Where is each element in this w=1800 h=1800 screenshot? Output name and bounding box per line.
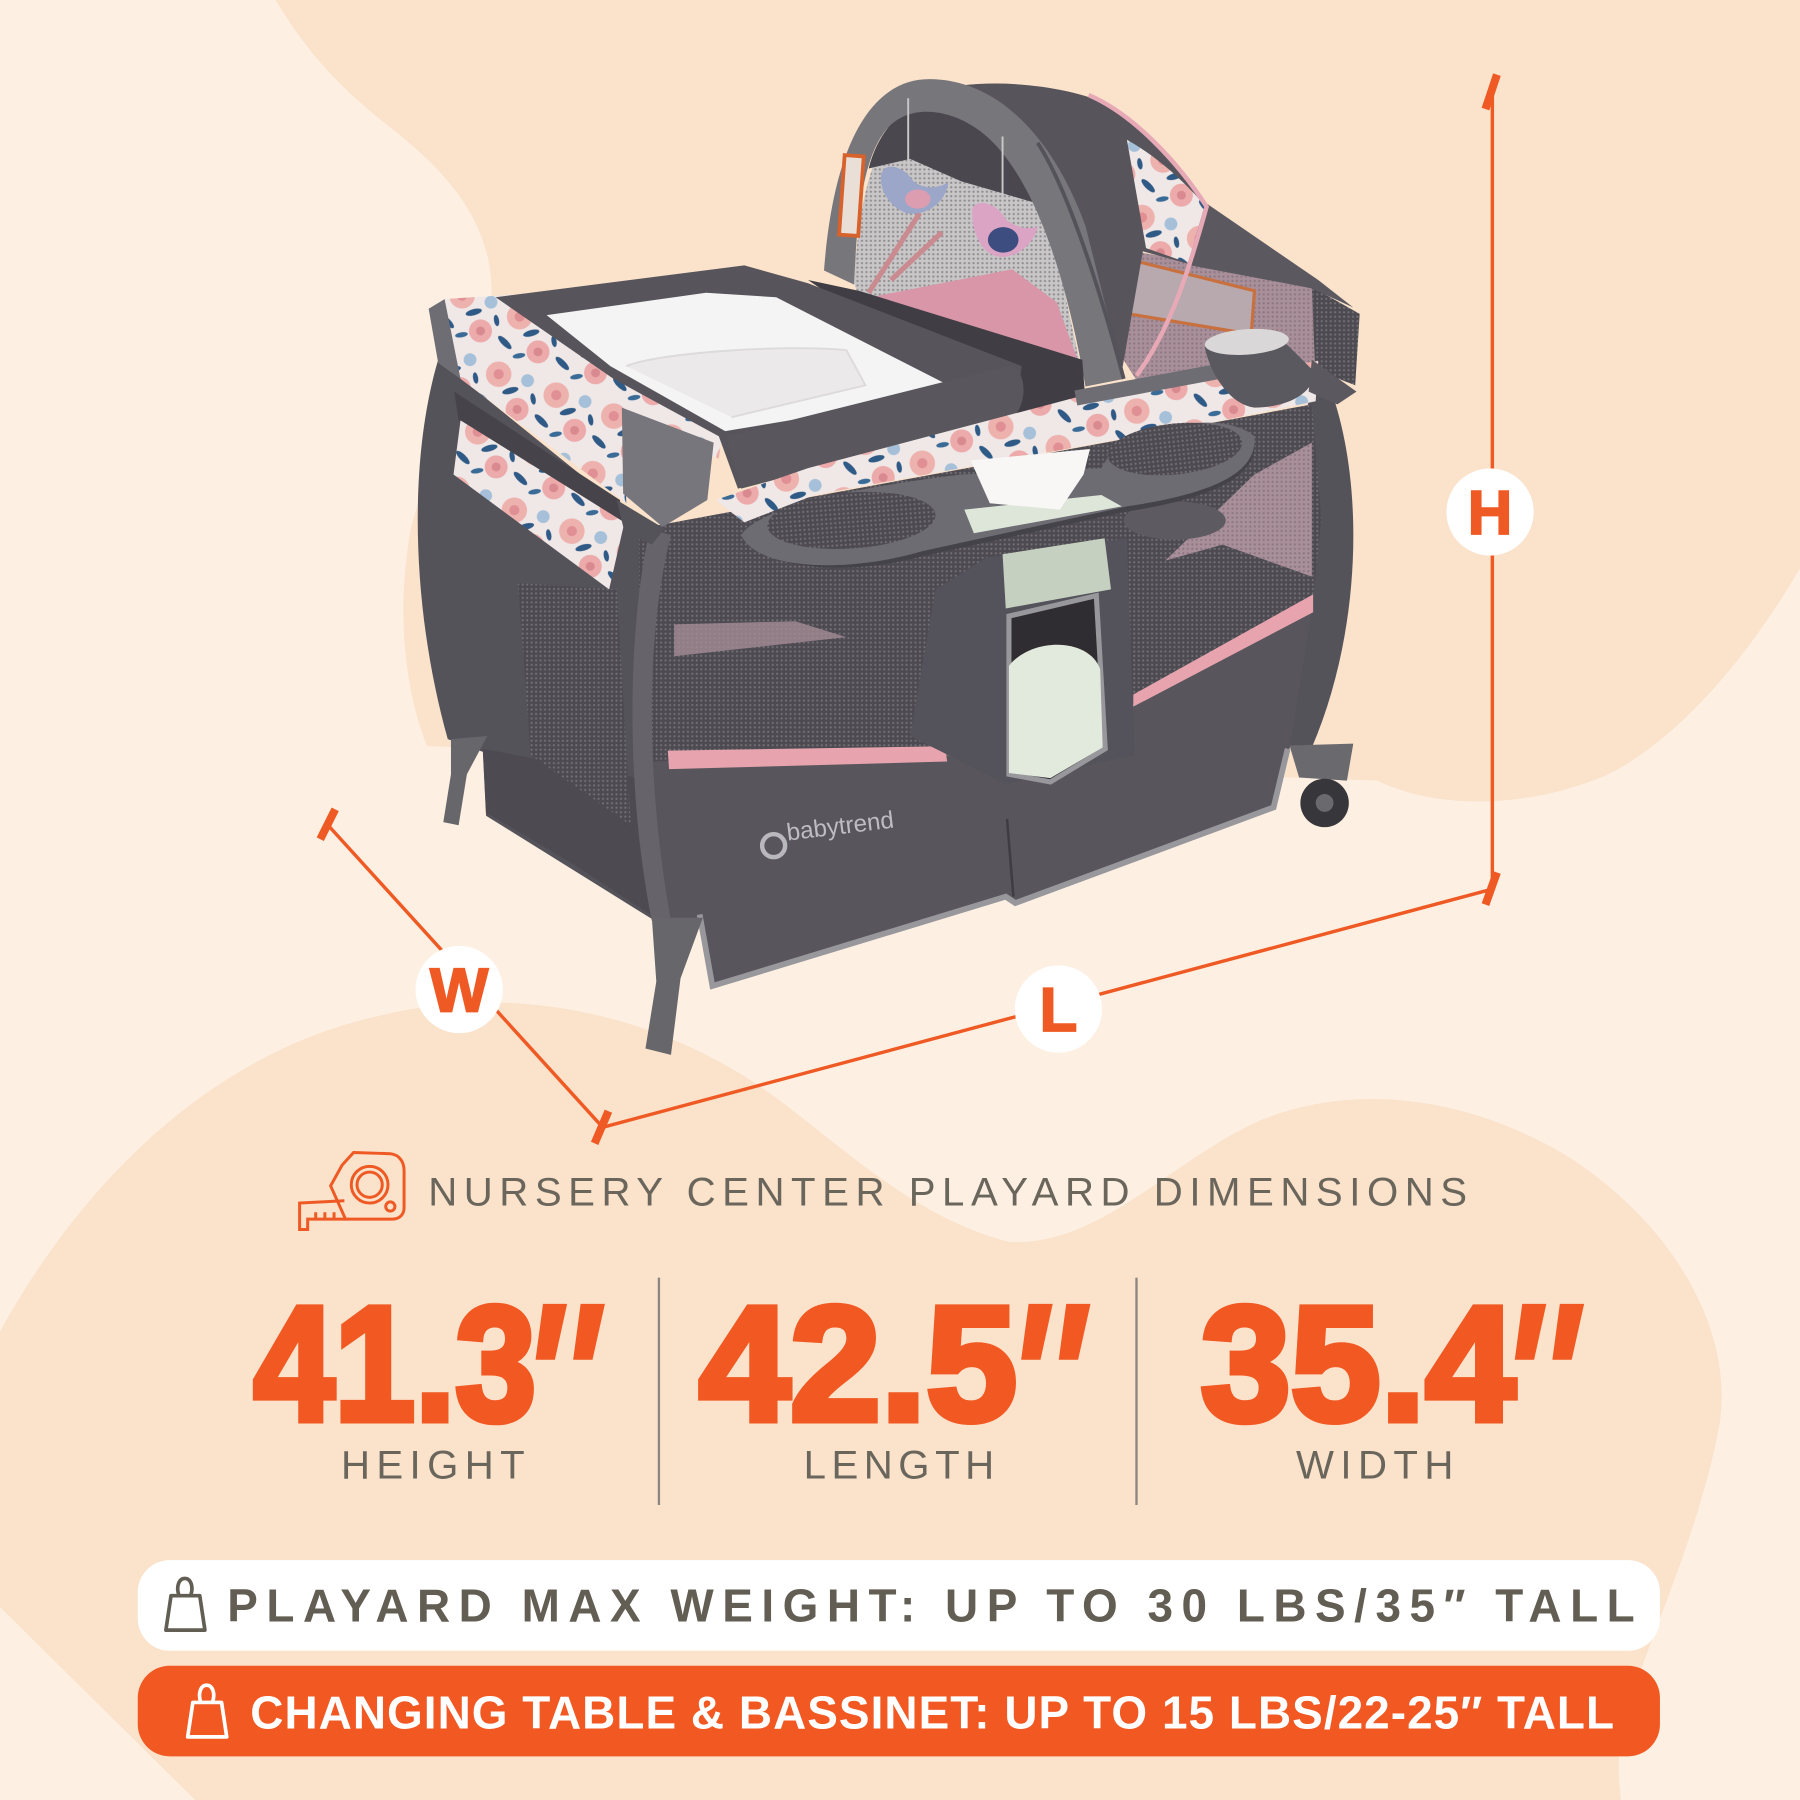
left plastic corner bbox=[429, 299, 461, 379]
lower front fabric bbox=[645, 602, 1313, 985]
stat: length bbox=[699, 1255, 1111, 1506]
gap behind changing table bbox=[808, 280, 1085, 420]
brand name: babytrend bbox=[785, 807, 895, 847]
lower basket left bbox=[763, 551, 929, 605]
tray bbox=[741, 423, 1255, 565]
changing pad bbox=[547, 293, 961, 431]
canopy pink trim bbox=[1089, 95, 1207, 376]
left floral flap bbox=[454, 420, 624, 589]
inner bassinet opening bbox=[854, 101, 1079, 360]
wipes package bbox=[964, 495, 1122, 533]
arch frame bbox=[824, 79, 1124, 387]
rear left leg bbox=[443, 736, 487, 825]
product photo: playard illustration bbox=[418, 79, 1360, 1055]
stat: height: 41.3 bbox=[254, 1272, 536, 1455]
front post bbox=[632, 529, 671, 921]
canopy rear cover bbox=[1191, 204, 1353, 307]
pink bassinet wall bbox=[858, 269, 1079, 364]
diapers bbox=[1009, 645, 1103, 778]
skirt trim bbox=[700, 749, 1288, 986]
skirt fold bbox=[1007, 819, 1013, 897]
stat: length: 42.5 bbox=[699, 1272, 1017, 1455]
tissue bbox=[971, 449, 1090, 510]
caddy opening bbox=[1009, 596, 1105, 782]
left floral rail bbox=[443, 295, 722, 503]
pink interior left bbox=[674, 621, 846, 656]
pink interior right bbox=[1165, 443, 1312, 577]
caddy bbox=[910, 538, 1135, 784]
left side panel bbox=[418, 360, 661, 921]
stat: length: " bbox=[981, 1255, 1111, 1506]
arch inner shadow bbox=[1038, 143, 1124, 379]
changing table cushion ring bbox=[496, 265, 1022, 489]
stat: width: " bbox=[1475, 1255, 1605, 1506]
bird blue wing bbox=[905, 189, 931, 209]
panel: playard max weight bbox=[138, 1560, 1660, 1651]
stat: width: WIDTH bbox=[1296, 1443, 1453, 1488]
bird blue bbox=[881, 167, 948, 214]
pink stripe right bbox=[1133, 594, 1313, 707]
rear mesh wall bbox=[1095, 245, 1315, 385]
mobile strings bbox=[908, 98, 1003, 207]
heading: NURSERY CENTER PLAYARD DIMENSIONS bbox=[428, 1169, 1467, 1214]
dimension line: height bbox=[1446, 75, 1534, 905]
bird pink bbox=[972, 203, 1038, 257]
orange tag bbox=[839, 155, 864, 236]
icon: weight white bbox=[188, 1685, 227, 1737]
dimension line: width bbox=[320, 809, 608, 1143]
divider bbox=[1135, 1278, 1138, 1505]
caddy wipes bbox=[1003, 538, 1111, 608]
canopy floral panel bbox=[1127, 140, 1205, 263]
right hinge bbox=[1309, 360, 1356, 404]
main front mesh bbox=[639, 404, 1321, 765]
cup right bbox=[1105, 417, 1245, 481]
dimension line: length bbox=[603, 890, 1490, 1127]
rear corner mesh bbox=[1305, 283, 1360, 385]
side fold band bbox=[454, 392, 622, 526]
stat: height: HEIGHT bbox=[341, 1443, 525, 1488]
divider bbox=[658, 1278, 660, 1505]
canopy fabric bbox=[961, 84, 1207, 379]
stat: height bbox=[254, 1255, 625, 1506]
panel: changing table and bassinet weight: CHANGING TABLE & BASSINET: UP TO 15 LBS/22-25″ TALL bbox=[250, 1686, 1614, 1738]
pad shadow fold bbox=[626, 348, 865, 417]
flap to post filler bbox=[617, 500, 665, 545]
mesh struts bbox=[869, 213, 942, 293]
icon: weight bbox=[166, 1578, 205, 1630]
bird pink wing bbox=[988, 227, 1019, 253]
dimension line: width: W bbox=[430, 956, 489, 1025]
stat: width bbox=[1201, 1255, 1605, 1506]
dimension line: length: L bbox=[1039, 976, 1077, 1045]
toy box bbox=[1204, 326, 1315, 408]
side skirt bbox=[483, 749, 655, 918]
front floral rail bbox=[716, 361, 1318, 522]
warning label bbox=[1117, 256, 1254, 334]
stat: height: " bbox=[495, 1255, 625, 1506]
cushion front roll bbox=[726, 365, 1024, 489]
right pillar bbox=[1277, 360, 1353, 747]
corner plastic bbox=[622, 408, 714, 527]
stat: width: 35.4 bbox=[1201, 1272, 1515, 1455]
tray lip bbox=[741, 436, 1255, 568]
wheel assembly bbox=[1290, 744, 1353, 827]
dimension line: height: H bbox=[1468, 479, 1512, 548]
front leg bbox=[645, 918, 703, 1055]
panel: changing table and bassinet weight bbox=[138, 1666, 1660, 1756]
pink stripe left bbox=[668, 746, 947, 769]
cup left bbox=[766, 487, 937, 554]
logo mark bbox=[762, 834, 785, 857]
side mesh pocket bbox=[518, 583, 631, 825]
panel: playard max weight: PLAYARD MAX WEIGHT: UP TO 30 LBS/35″ TALL bbox=[227, 1579, 1635, 1631]
lower basket right bbox=[1124, 501, 1226, 540]
icon: tape measure bbox=[300, 1153, 404, 1229]
stat: length: LENGTH bbox=[804, 1443, 994, 1488]
mobile bar bbox=[1076, 371, 1219, 398]
canopy dark interior bbox=[869, 101, 1038, 204]
